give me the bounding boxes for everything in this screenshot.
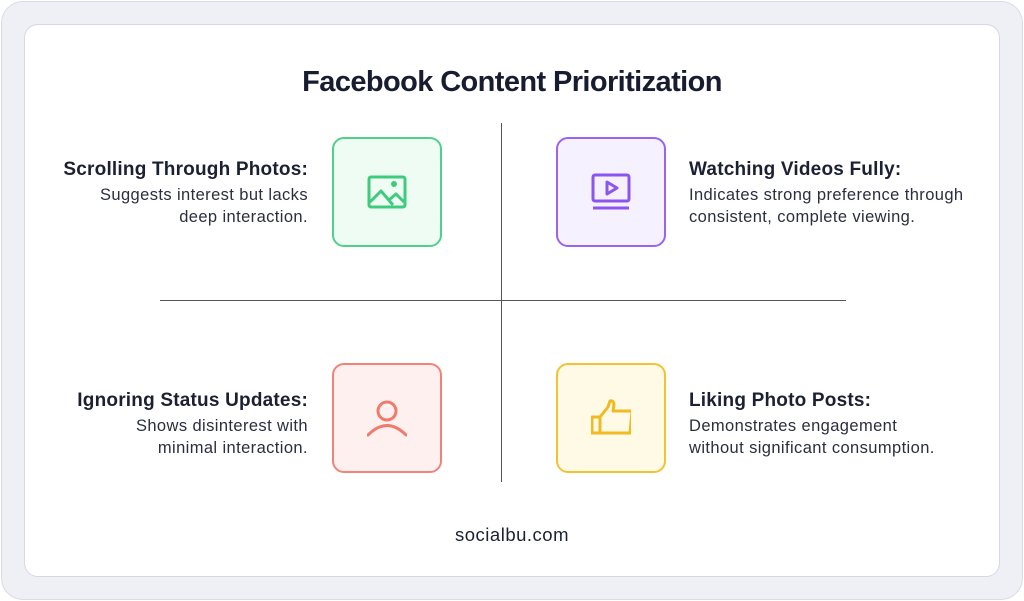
text: ignoring status: Ignoring Status Updates:: [77, 390, 308, 411]
text: liking photo posts: [689, 390, 935, 457]
text: ignoring status: Shows disinterest with: [136, 417, 308, 435]
text: watching videos: [689, 159, 964, 226]
text: scrolling photos: deep interaction.: [179, 208, 308, 226]
text: scrolling photos: Scrolling Through Photos:: [63, 159, 308, 180]
vertical divider: [501, 123, 502, 482]
footer: socialbu.com: [455, 524, 569, 545]
text: ignoring status: minimal interaction.: [158, 439, 308, 457]
text: scrolling photos: [63, 159, 308, 226]
horizontal divider: [160, 300, 846, 301]
text: liking photo posts: Demonstrates engagement: [689, 417, 897, 435]
text: watching videos: Watching Videos Fully:: [689, 159, 901, 180]
text: watching videos: consistent, complete viewing.: [689, 208, 915, 226]
icon box: video: [556, 137, 666, 247]
title: Facebook Content Prioritization: [302, 66, 722, 98]
text: liking photo posts: Liking Photo Posts:: [689, 390, 871, 411]
text: ignoring status: [77, 390, 308, 457]
icon box: person: [332, 363, 442, 473]
text: watching videos: Indicates strong preference through: [689, 186, 964, 204]
text: scrolling photos: Suggests interest but lacks: [100, 186, 308, 204]
icon box: photo: [332, 137, 442, 247]
text: liking photo posts: without significant consumption.: [689, 439, 935, 457]
icon box: thumbs up: [556, 363, 666, 473]
